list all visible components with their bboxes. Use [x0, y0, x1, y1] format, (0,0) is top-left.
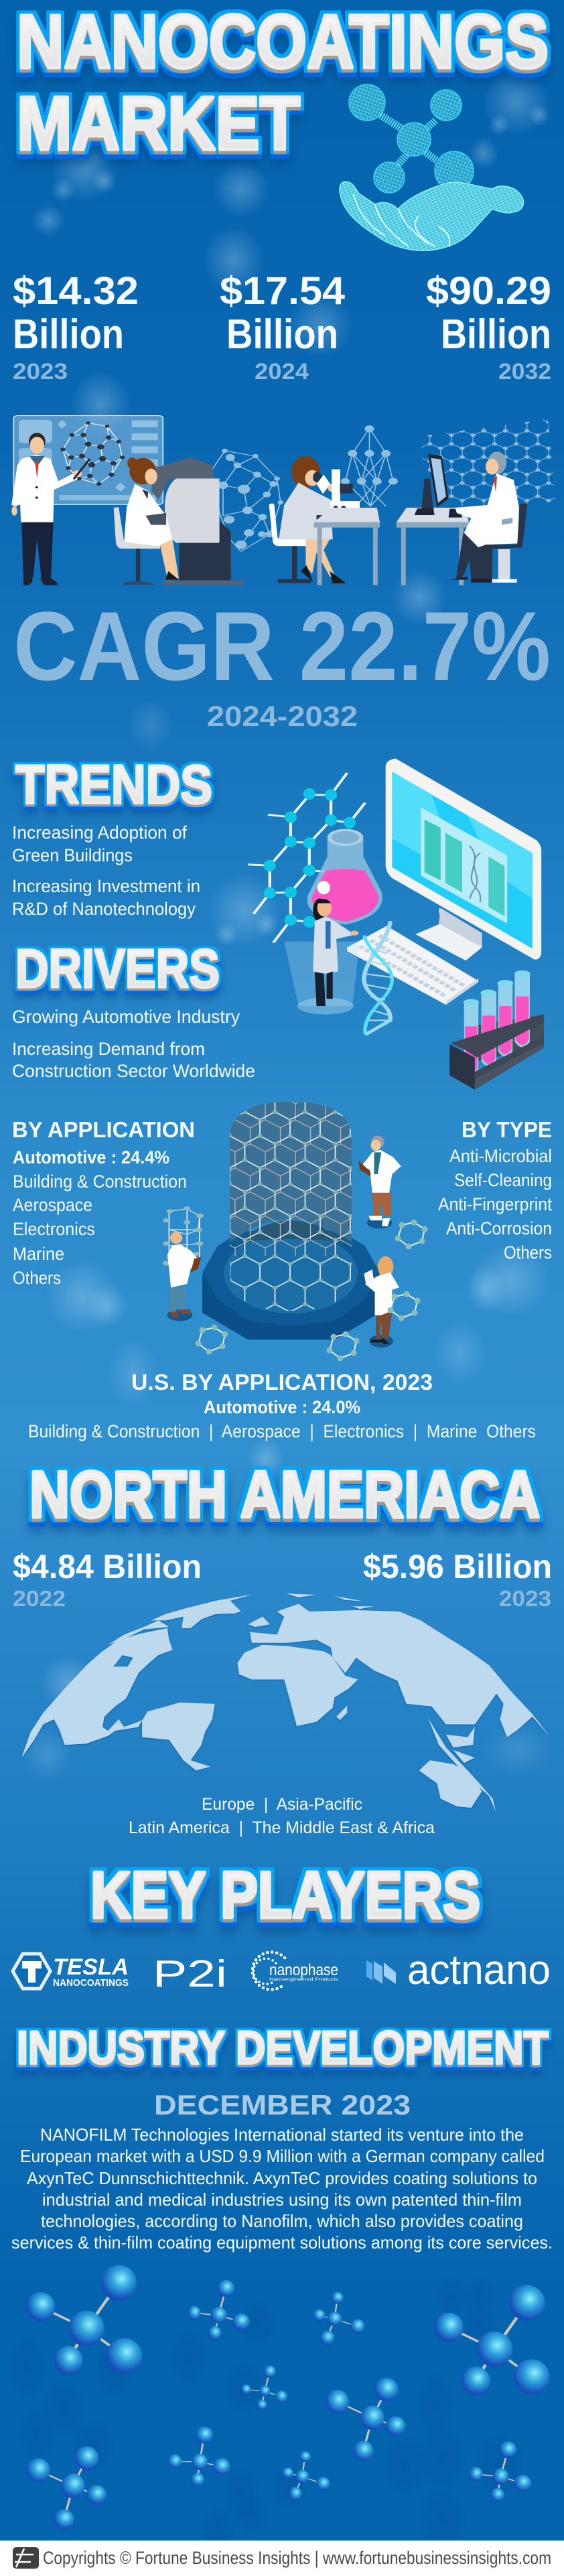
segment: by type: Anti-Fingerprint [438, 1194, 552, 1214]
regional stat: 2022 [13, 1548, 202, 1611]
logo: Tesla Nanocoatings [13, 1954, 129, 1989]
illustration: lab equipment, monitor, flask, DNA [249, 758, 544, 1090]
heading: DRIVERS: DRIVERS [15, 938, 220, 999]
development paragraph: technologies, according to Nanofilm, which also provides coating [41, 2211, 523, 2231]
stat: 2023 market size [13, 269, 139, 384]
scientist: top right [358, 1136, 401, 1228]
regional stat: 2022: 2022 [13, 1586, 66, 1611]
triangular network [341, 425, 398, 506]
trends list: Increasing Adoption of [12, 822, 187, 843]
drivers list: Growing Automotive Industry [12, 1007, 240, 1027]
illustration: scientists in a nano lab [11, 416, 556, 585]
segment: by application: Building & Construction [13, 1171, 187, 1192]
logo: P2i: P2i [153, 1952, 227, 1995]
decorative blurred molecule glows [20, 68, 555, 1782]
segment: by application: Electronics [13, 1219, 95, 1239]
decorative dark molecule shadows, bottom [5, 2276, 524, 2552]
stat: 2024 market size: $17.54 [220, 269, 345, 313]
stat: 2032 market size: $90.29 [426, 269, 551, 313]
heading: TRENDS: TRENDS [15, 754, 212, 815]
logo: Nanophase [253, 1952, 339, 1989]
platform top [202, 1231, 380, 1326]
segment: by type: Others [504, 1242, 552, 1263]
segment: by type: BY TYPE [462, 1117, 552, 1142]
segment: by application: Aerospace [13, 1195, 92, 1215]
development paragraph: NANOFILM Technologies International started its venture into the [40, 2125, 524, 2145]
segment: by application: Marine [13, 1244, 64, 1264]
illustration: carbon nanotube with scientists [163, 1102, 427, 1361]
logo: Tesla Nanocoatings: NANOCOATINGS [53, 1977, 129, 1989]
segment: by application: Others [13, 1268, 61, 1288]
other regions: Europe | Asia-Pacific [202, 1795, 362, 1814]
regional stat: 2023 [363, 1548, 552, 1611]
logo: Nanophase: nanophase [269, 1961, 338, 1979]
segment: by type: Anti-Corrosion [446, 1218, 552, 1238]
display panel with fullerene [13, 416, 163, 504]
stat: 2032 market size: Billion [441, 311, 551, 358]
molecule: bottom right [469, 2441, 531, 2502]
fullerene behind machine [212, 449, 283, 551]
molecule: top centre left [188, 2280, 250, 2340]
platform inner floor [224, 1233, 358, 1313]
molecules decoration [26, 2265, 550, 2530]
molecule: centre right [326, 2378, 406, 2461]
molecule: large top left [26, 2265, 142, 2375]
regional stat: 2023: 2023 [499, 1586, 551, 1611]
scientist woman [284, 898, 360, 1014]
segment: U.S. by application: U.S. BY APPLICATION, 2023 [131, 1370, 433, 1394]
logo: Tesla Nanocoatings: TESLA [53, 1954, 129, 1980]
DNA helix [364, 921, 392, 1035]
man with pointer [11, 433, 90, 585]
molecule: bottom centre left [168, 2427, 230, 2487]
front lattice [230, 1102, 352, 1311]
microscope and table [314, 470, 380, 585]
segment: by type [438, 1117, 552, 1263]
molecule: large top right [435, 2285, 550, 2396]
title: NANOCOATINGS MARKET: MARKET [17, 81, 300, 165]
segment: by application [12, 1117, 195, 1288]
stat: 2032 market size: 2032 [498, 359, 551, 384]
development paragraph [11, 2125, 553, 2252]
molecule: bottom left [26, 2446, 107, 2530]
trends list: R&D of Nanotechnology [12, 899, 196, 919]
stat: 2023 market size: $14.32 [13, 269, 139, 313]
trends list [12, 822, 200, 919]
monitor [386, 758, 541, 960]
logo: actnano: actnano [407, 1947, 551, 1993]
stat: 2024 market size: 2024 [255, 359, 309, 384]
molecule: top centre right [313, 2292, 365, 2346]
segment: by application: BY APPLICATION [12, 1117, 195, 1142]
stat: 2023 market size: 2023 [13, 359, 68, 384]
heading: KEY PLAYERS: KEY PLAYERS [90, 1858, 480, 1932]
tube shading [230, 1102, 352, 1242]
woman at microscope [269, 456, 346, 583]
title: NANOCOATINGS MARKET [17, 0, 549, 165]
stat: 2032 market size [426, 269, 551, 384]
stat: 2023 market size: Billion [13, 311, 124, 358]
loose hexagon rings [196, 1219, 427, 1361]
regional stat: 2022: $4.84 Billion [13, 1548, 202, 1585]
stat: 2024 market size [220, 269, 345, 384]
segment: by type: Anti-Microbial [449, 1146, 552, 1166]
footer band [0, 2541, 564, 2576]
development paragraph: European market with a USD 9.9 Million with a German company called [20, 2146, 545, 2166]
graphene sheet [420, 419, 556, 506]
development paragraph: services & thin-film coating equipment solutions among its core services. [11, 2232, 553, 2252]
segment: U.S. by application: Automotive : 24.0% [204, 1397, 360, 1417]
tube interior dark end [236, 1220, 346, 1242]
segment: by application: Automotive : 24.4% [13, 1147, 169, 1167]
other regions: Latin America | The Middle East & Africa [129, 1818, 435, 1837]
test tubes in rack [449, 971, 544, 1090]
date: DECEMBER 2023 [154, 2089, 411, 2121]
drivers list: Construction Sector Worldwide [12, 1061, 255, 1081]
drivers list [12, 1007, 255, 1081]
other regions [129, 1795, 435, 1837]
footer logo [13, 2547, 39, 2569]
world map [13, 1593, 551, 1812]
CAGR figure: 2024-2032 [207, 701, 358, 733]
regional stat: 2023: $5.96 Billion [363, 1548, 552, 1585]
segment: U.S. by application [28, 1370, 536, 1441]
trends list: Increasing Investment in [12, 876, 200, 896]
hexagonal chemical structure [249, 773, 365, 942]
back lattice [230, 1102, 352, 1256]
scientist: bottom right [364, 1257, 399, 1348]
development paragraph: AxynTeC Dunnschichttechnik. AxynTeC provides coating solutions to [27, 2168, 537, 2188]
drivers list: Increasing Demand from [12, 1039, 205, 1059]
molecule: bottom centre [282, 2451, 330, 2501]
development paragraph: industrial and medical industries using its own patented thin-film [42, 2190, 522, 2210]
man at computer [397, 451, 527, 585]
logo: Nanophase: Nanoengineered Products [269, 1977, 339, 1982]
scientist: left [163, 1206, 204, 1321]
segment: by type: Self-Cleaning [454, 1170, 552, 1190]
trends list: Green Buildings [12, 845, 133, 865]
icon: wireframe molecule held by hand [340, 84, 524, 251]
woman at machine [114, 457, 244, 585]
platform [202, 1232, 380, 1340]
flask [307, 829, 382, 925]
keyboard [347, 926, 478, 1005]
stat: 2024 market size: Billion [226, 311, 338, 358]
molecule: small centre [241, 2366, 287, 2410]
